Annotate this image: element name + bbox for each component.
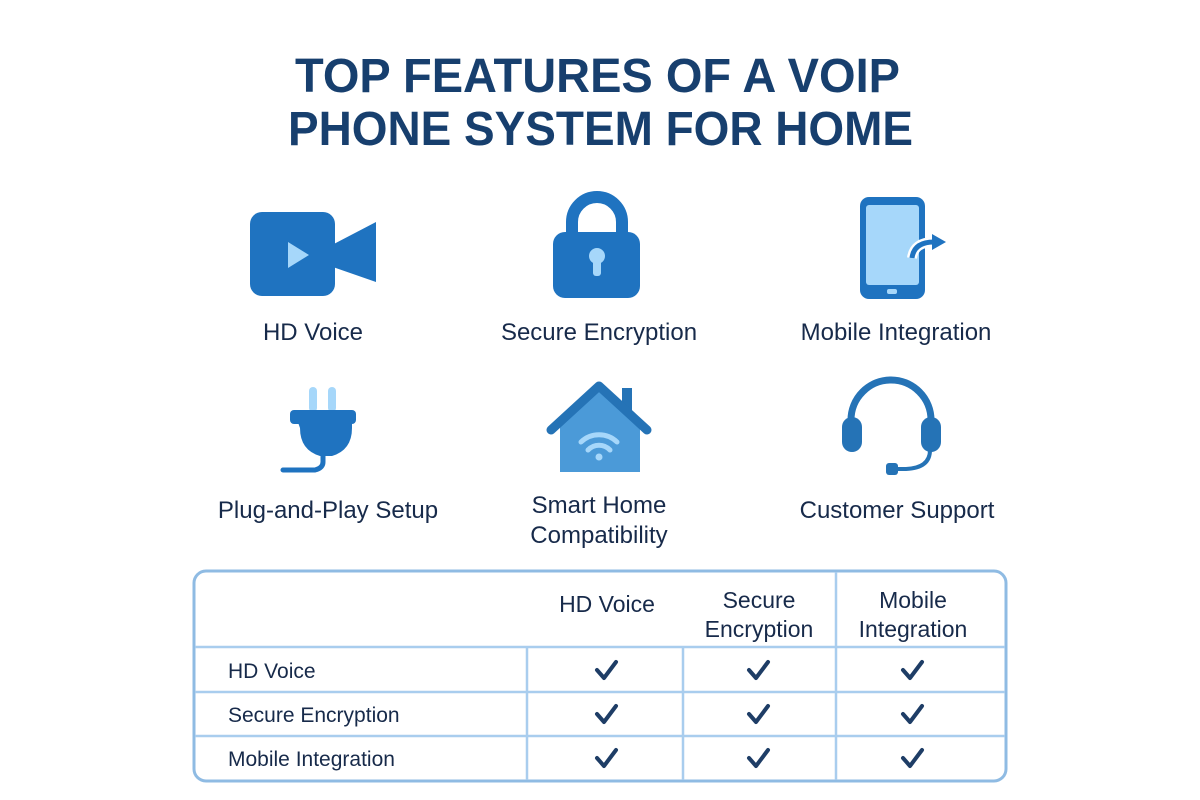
icon: smart home (551, 386, 647, 472)
title: PHONE SYSTEM FOR HOME (288, 103, 913, 156)
table header: Secure (723, 587, 795, 613)
row labels: Secure Encryption (228, 704, 400, 727)
icon: padlock (553, 197, 640, 298)
label: Secure Encryption: Secure Encryption (501, 319, 697, 346)
row labels (228, 660, 400, 771)
icon: mobile phone with arrow (860, 197, 946, 299)
check marks (597, 662, 922, 766)
title (288, 50, 913, 156)
label: Customer Support: Customer Support (800, 497, 995, 524)
label: Plug-and-Play Setup: Plug-and-Play Setup (218, 497, 438, 524)
icon: headset (842, 380, 941, 475)
label: Smart Home Compatibility: Smart Home (532, 492, 666, 519)
row labels: Mobile Integration (228, 748, 395, 771)
comparison table (194, 571, 1006, 781)
table header: HD Voice (559, 591, 655, 617)
label: Smart Home Compatibility: Compatibility (530, 522, 668, 549)
table header: Encryption (705, 616, 813, 642)
icon: plug (283, 387, 356, 470)
table header: Mobile (879, 587, 947, 613)
label: Mobile Integration: Mobile Integration (801, 319, 991, 346)
table header (559, 587, 967, 642)
icon: video camera (250, 212, 376, 296)
table header: Integration (859, 616, 967, 642)
label: HD Voice: HD Voice (263, 319, 363, 346)
row labels: HD Voice (228, 660, 316, 683)
title: TOP FEATURES OF A VOIP (295, 50, 900, 103)
